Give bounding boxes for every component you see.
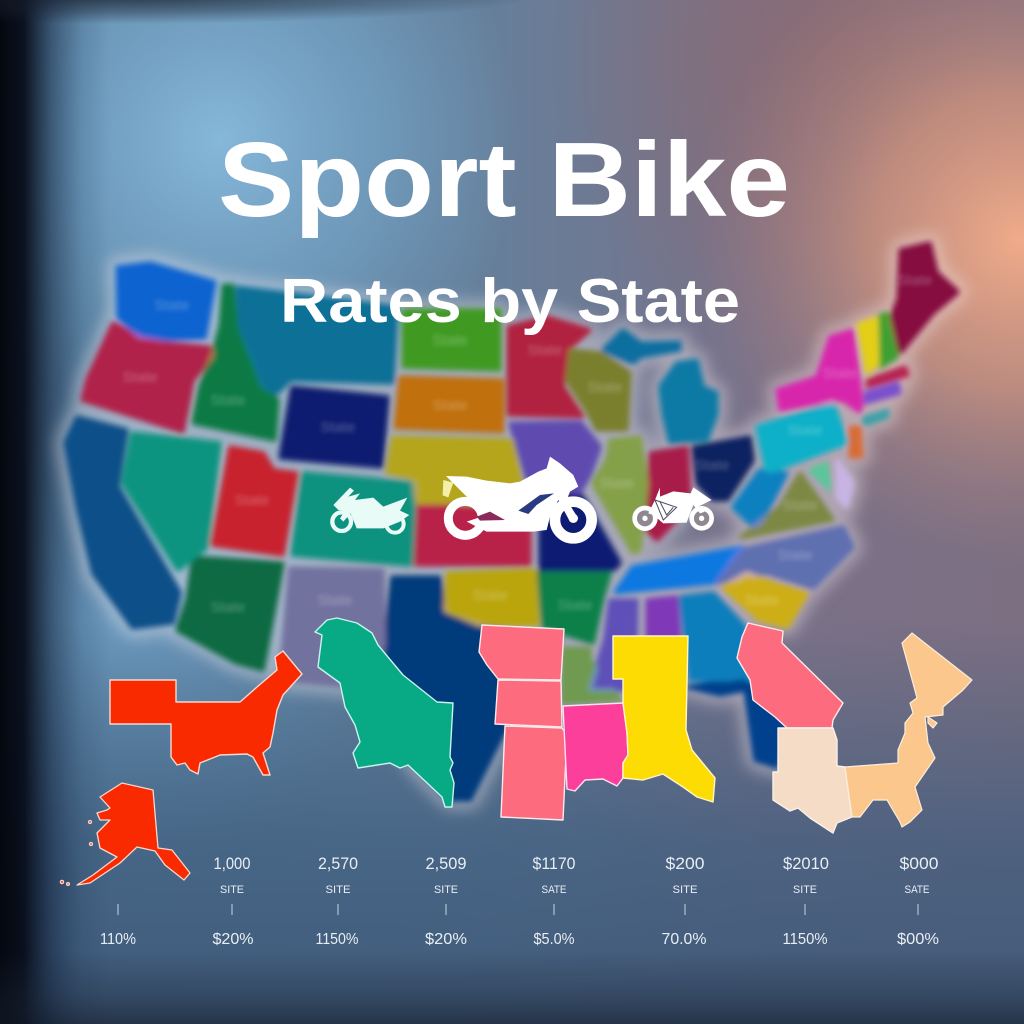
blurred state name labels: State [210,392,246,409]
column 4: $20% [425,931,467,948]
blurred state name labels: State [777,547,813,564]
column 7 [782,854,829,948]
column 7: SITE [793,884,817,896]
column 6: 70.0% [662,931,706,948]
column 5 [532,854,576,948]
blurred state name labels: State [472,587,508,604]
region: coral [737,623,843,728]
column 5: SATE [542,884,566,896]
blurred state name labels: State [432,332,468,349]
icon: large motorcycle centre [443,457,592,538]
column 2: SITE [220,884,244,896]
panel: data columns [100,854,939,948]
column 2: $20% [212,931,254,948]
blurred state name labels: State [897,272,933,289]
column 4: SITE [434,884,458,896]
column 8 [897,854,939,948]
column 6: $200 [666,854,704,873]
blurred state name labels: State [557,597,593,614]
column 5: $1170 [532,854,576,873]
panel: blurred US state map [65,243,958,800]
region: magenta [563,703,628,791]
blurred state name labels: State [432,397,468,414]
panel: highlighted state regions [60,618,972,885]
title line 2: Rates by State [280,267,740,336]
column 8: $00% [897,931,939,948]
column 6: SITE [672,884,698,896]
icon: small motorcycle left [332,488,409,533]
column 1: 110% [100,931,136,948]
column 5: $5.0% [534,931,574,948]
column 1 [100,904,136,948]
column 2: 1,000 [214,854,250,873]
column 6 [662,854,706,948]
column 4 [425,854,467,948]
column 3: 2,570 [318,854,358,873]
blurred state name labels: State [599,475,635,492]
column 7: 1150% [782,931,828,948]
region: pink stacked states [479,625,567,820]
column 8: SATE [904,884,930,896]
blurred state name labels: State [744,592,780,609]
title [218,121,790,336]
region: yellow [613,636,715,802]
column 8: $000 [900,854,938,873]
region: cream [773,728,852,833]
blurred state name labels: State [317,592,353,609]
region: Alaska [60,783,190,885]
blurred state name labels: State [787,422,823,439]
column 3: 1150% [316,931,358,948]
region: peach [845,633,972,827]
column 2 [212,854,254,948]
blurred state name labels: State [234,492,270,509]
blurred state name labels [122,272,933,616]
region: red east shape [110,651,302,775]
region: teal [315,618,454,807]
icon: small motorcycle right [635,487,712,529]
column 3 [316,854,358,948]
blurred state name labels: State [122,369,158,386]
blurred state name labels: State [210,599,246,616]
blurred state name labels: State [320,419,356,436]
blurred state name labels: State [694,457,730,474]
title line 1: Sport Bike [218,121,790,239]
column 3: SITE [326,884,350,896]
blurred state name labels: State [587,379,623,396]
blurred state name labels: State [154,297,190,314]
column 4: 2,509 [426,854,466,873]
blurred state name labels: State [527,342,563,359]
blurred state name labels: State [822,365,858,382]
column 7: $2010 [783,854,829,873]
blurred state name labels: State [782,497,818,514]
